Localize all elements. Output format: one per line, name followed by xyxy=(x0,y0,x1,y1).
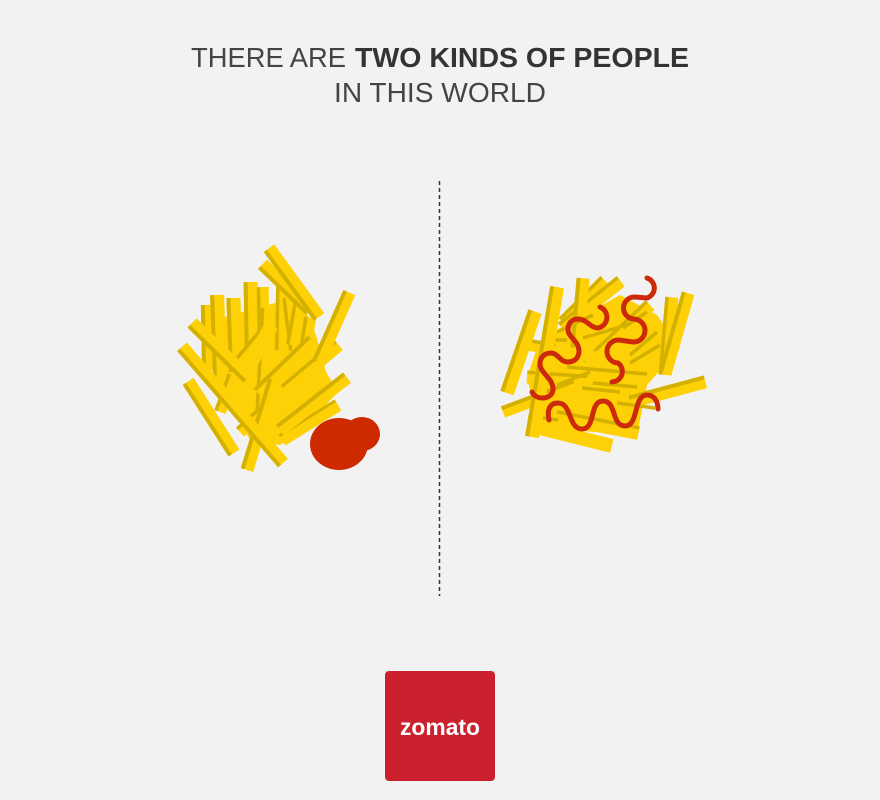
zomato logo: zomato xyxy=(400,714,480,740)
title: TWO KINDS OF PEOPLE xyxy=(355,42,689,73)
title: IN THIS WORLD xyxy=(334,77,546,108)
left illustration: fries with ketchup on the side xyxy=(177,244,380,472)
zomato logo xyxy=(385,671,495,781)
left fries pile xyxy=(177,244,355,472)
dashed center divider xyxy=(438,181,440,596)
title: THERE ARE xyxy=(191,42,346,73)
right illustration: fries with ketchup squiggles on top xyxy=(500,276,707,453)
title xyxy=(191,42,689,108)
ketchup squiggles xyxy=(532,278,658,429)
right fries pile xyxy=(500,276,707,453)
ketchup blob xyxy=(310,417,380,470)
